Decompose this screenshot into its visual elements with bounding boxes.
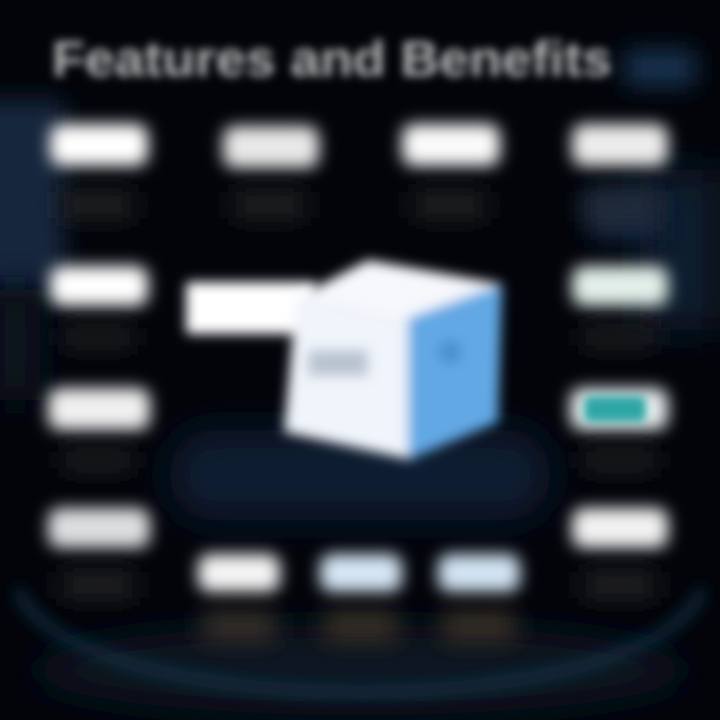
card 6 — [48, 388, 150, 470]
card 5 — [50, 266, 148, 347]
card 1 — [50, 124, 148, 218]
platform ring — [18, 590, 702, 692]
card 12 — [320, 554, 402, 640]
card 10 — [572, 508, 668, 598]
card 11 — [198, 554, 280, 640]
card 13 — [438, 554, 520, 640]
card 2 — [223, 126, 319, 218]
central callout box — [186, 282, 316, 334]
card 7 — [48, 508, 150, 598]
card 8 — [572, 266, 668, 347]
feature cards: right column — [570, 266, 668, 598]
card 4 — [572, 124, 668, 222]
feature cards: left column — [48, 266, 150, 598]
central product cube — [284, 260, 502, 460]
feature cards: bottom row — [198, 554, 520, 640]
cube label — [308, 350, 368, 376]
card 3 — [402, 124, 500, 218]
title: Features and Benefits — [52, 31, 612, 87]
card 9 — [570, 388, 668, 470]
feature cards: top row — [50, 124, 668, 222]
cube side icon — [438, 340, 462, 364]
